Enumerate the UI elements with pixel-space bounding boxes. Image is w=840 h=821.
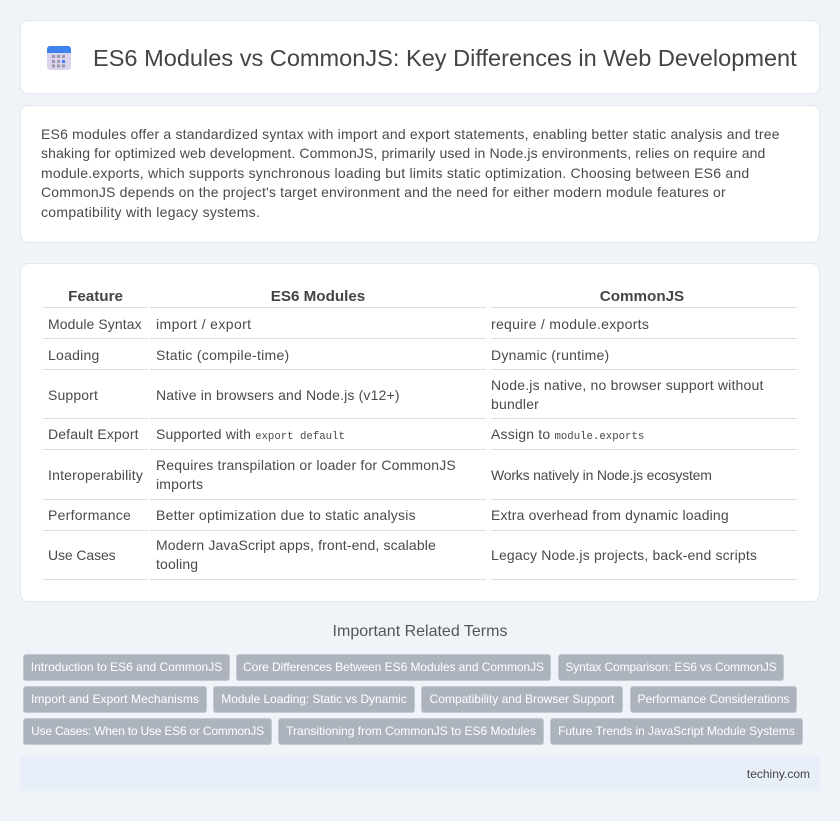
- row: Default Export: Supported with export default: [156, 426, 345, 443]
- row: Default Export: [48, 426, 644, 443]
- row: Performance: [48, 507, 729, 523]
- related term tags: Syntax Comparison: ES6 vs CommonJS: [565, 660, 777, 674]
- intro paragraph: shaking for optimized web development. CommonJS, primarily used in Node.js environments, relies on require and: [41, 145, 765, 161]
- row: Interoperability: Requires transpilation or loader for CommonJS: [156, 457, 456, 473]
- table header: CommonJS: [600, 288, 684, 305]
- intro paragraph: compatibility with legacy systems.: [41, 204, 260, 220]
- row: Use Cases: Legacy Node.js projects, back-end scripts: [491, 547, 757, 563]
- header card: [20, 20, 820, 94]
- intro paragraph: module.exports, which supports synchronous loading but limits static optimization. Choosing between ES6 and: [41, 164, 749, 180]
- footer source: techiny.com: [747, 767, 810, 781]
- row: Interoperability: Interoperability: [48, 467, 143, 483]
- intro paragraph: [41, 126, 780, 220]
- intro paragraph: CommonJS depends on the project's target environment and the need for either modern module features or: [41, 184, 726, 200]
- related term tags: Core Differences Between ES6 Modules and CommonJS: [243, 660, 544, 674]
- row: Performance: Better optimization due to static analysis: [156, 507, 416, 523]
- row: Performance: Performance: [48, 507, 131, 523]
- row: Support: Support: [48, 387, 98, 403]
- related term tags: Import and Export Mechanisms: [31, 692, 199, 706]
- related term tags: Use Cases: When to Use ES6 or CommonJS: [31, 724, 264, 738]
- row: Support: Node.js native, no browser support without: [491, 377, 764, 393]
- row: Interoperability: Works natively in Node.js ecosystem: [491, 467, 712, 483]
- icon: calendar grid: [47, 46, 71, 70]
- footer bar: [20, 757, 820, 791]
- table header: [68, 288, 684, 305]
- row: Module Syntax: import / export: [156, 316, 251, 332]
- panel: introduction text: [20, 105, 820, 243]
- row: Loading: Static (compile-time): [156, 347, 289, 363]
- related term tags: Performance Considerations: [637, 692, 790, 706]
- row: Loading: Loading: [48, 347, 100, 363]
- panel: comparison table: [20, 263, 820, 602]
- title: ES6 Modules vs CommonJS: Key Differences in Web Development: [93, 45, 797, 71]
- row: Use Cases: tooling: [156, 556, 198, 572]
- related term tags: Transitioning from CommonJS to ES6 Modules: [286, 724, 536, 738]
- row: Default Export: Assign to module.exports: [491, 426, 644, 443]
- row: Use Cases: [48, 537, 757, 572]
- related term tags: [23, 654, 803, 745]
- related term tags: Compatibility and Browser Support: [430, 692, 614, 706]
- row: Loading: Dynamic (runtime): [491, 347, 609, 363]
- related term tags: Module Loading: Static vs Dynamic: [221, 692, 407, 706]
- row: Module Syntax: Module Syntax: [48, 316, 142, 332]
- row: Support: [48, 377, 764, 412]
- row: Use Cases: Modern JavaScript apps, front-end, scalable: [156, 537, 436, 553]
- row: Loading: [48, 347, 609, 363]
- row: Module Syntax: require / module.exports: [491, 316, 649, 332]
- table header: Feature: [68, 288, 123, 305]
- row: Interoperability: imports: [156, 476, 203, 492]
- related term tags: Introduction to ES6 and CommonJS: [31, 660, 222, 674]
- row: Use Cases: Use Cases: [48, 547, 116, 563]
- row: Performance: Extra overhead from dynamic loading: [491, 507, 729, 523]
- row: Module Syntax: [48, 316, 649, 332]
- table header: ES6 Modules: [271, 288, 365, 305]
- row: Interoperability: [48, 457, 712, 492]
- heading: related terms: Important Related Terms: [333, 623, 507, 640]
- intro paragraph: ES6 modules offer a standardized syntax with import and export statements, enabling better static analysis and tree: [41, 126, 780, 142]
- row: Support: bundler: [491, 396, 539, 412]
- row: Support: Native in browsers and Node.js (v12+): [156, 387, 400, 403]
- row: Default Export: Default Export: [48, 426, 139, 442]
- related term tags: Future Trends in JavaScript Module Systems: [558, 724, 795, 738]
